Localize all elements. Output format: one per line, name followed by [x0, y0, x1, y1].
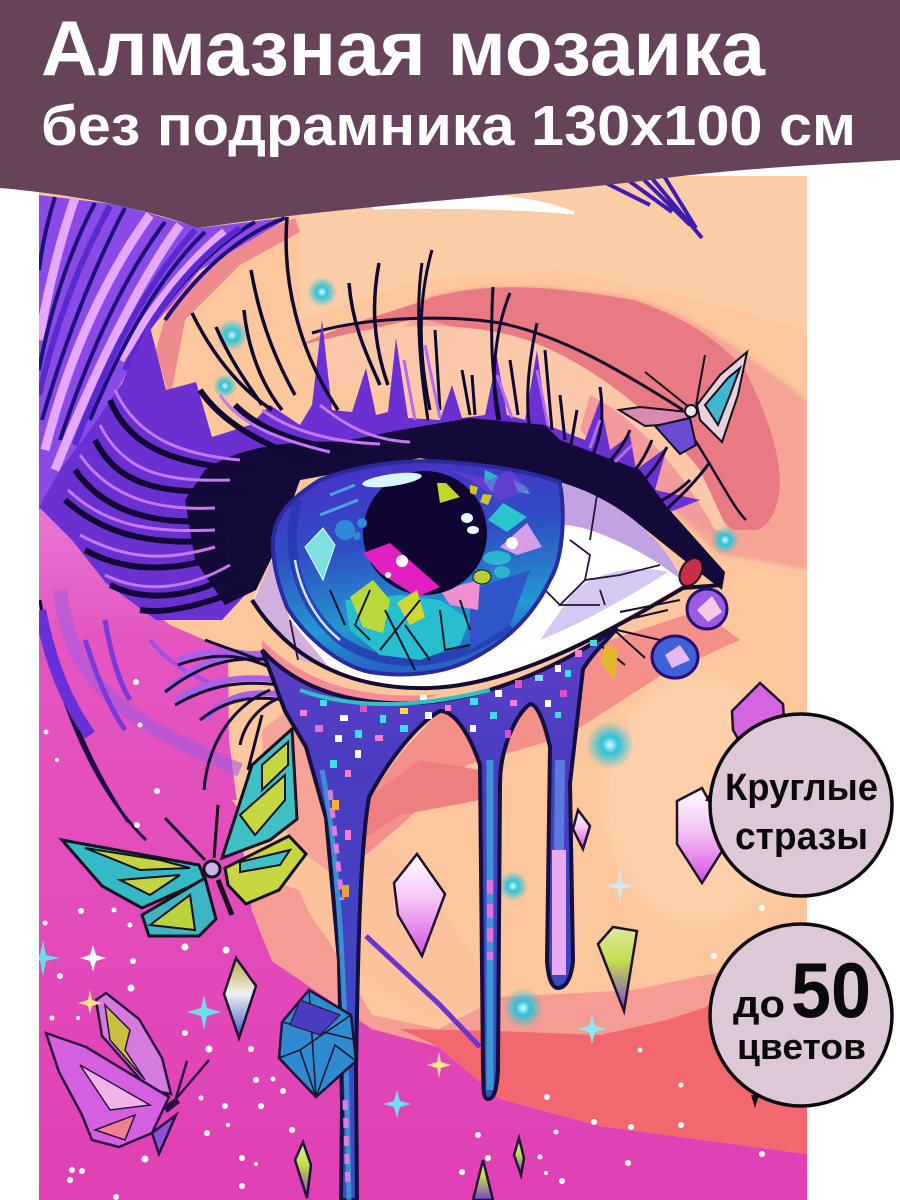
lilac shade [563, 483, 682, 580]
teal lower patch [345, 595, 470, 660]
gem purple facet [290, 1000, 340, 1035]
lash vein right [695, 440, 746, 520]
subtitle: без подрамника 130х100 см [41, 94, 856, 158]
glowing sparks [213, 277, 739, 1028]
yellow glitter spot [600, 645, 618, 680]
butterfly: top right [619, 352, 747, 454]
coral band under lower lid [360, 610, 740, 860]
eyebrow tip purple [600, 176, 702, 238]
upper eyelid inner pink [300, 287, 780, 530]
main drip highlight [322, 770, 349, 1200]
badge: up to 50 colours: 50 [791, 946, 871, 1034]
lower left lashes [165, 640, 290, 790]
badge: up to 50 colours: до [733, 984, 785, 1026]
coral band left of drip [262, 713, 329, 872]
glitter band [300, 640, 597, 897]
four point stars [80, 945, 106, 971]
inner cheek peach [232, 800, 328, 940]
butterfly: bottom left [46, 993, 209, 1154]
third drip upper blue [559, 760, 560, 850]
crease line [312, 318, 683, 410]
upper face wash [300, 176, 807, 330]
pink mosaic lower [440, 580, 480, 610]
white dots and stars [32, 679, 765, 1200]
blue right lower patch [470, 570, 530, 650]
dark coral wedge [362, 760, 480, 840]
crystal cone [598, 927, 637, 1011]
picture: diamond mosaic eye artwork [32, 176, 807, 1200]
iris inner rim [292, 500, 510, 661]
eyelash purple mass [39, 320, 700, 620]
badge: round rhinestones: Круглые [725, 767, 878, 809]
crystal right [677, 788, 725, 883]
crystals [224, 683, 785, 1200]
teal lid line [300, 690, 490, 704]
crystal bottom 1 [295, 1142, 311, 1198]
crystal bottom 3 [514, 1138, 524, 1175]
badge: round rhinestones [710, 714, 892, 896]
purple diagonal strand [366, 936, 480, 1047]
skin background [39, 176, 807, 1200]
butterfly: left [62, 729, 306, 936]
eye white [252, 482, 683, 690]
badge: up to 50 colours: цветов [737, 1026, 866, 1067]
gem facets [279, 990, 356, 1097]
badge: up to 50 colours [710, 924, 892, 1106]
hair [39, 195, 290, 510]
lower lid line [252, 585, 722, 688]
main drip pink flecks [330, 790, 348, 1190]
crystal teal piece [707, 760, 760, 810]
third drip highlight [552, 850, 566, 975]
crystal small centre right [573, 810, 590, 849]
upper left pink near hair [156, 218, 300, 400]
crystal centre [394, 854, 445, 956]
crystal top right [732, 683, 785, 760]
second drip pink flecks [487, 880, 493, 960]
lower lid pink band [262, 640, 440, 708]
left lilac shade [254, 560, 330, 668]
iris white arc [295, 560, 340, 640]
dark spike below badge [751, 1095, 759, 1108]
dripping tears [262, 628, 617, 1200]
iris facets [363, 543, 440, 597]
eyelid light fold [310, 326, 730, 535]
crystal left small [224, 958, 256, 1038]
lighter peach soft circle [607, 677, 763, 923]
title: Алмазная мозаика [41, 4, 766, 92]
iris cracks [330, 590, 470, 670]
header banner [0, 0, 900, 228]
hair dark strands [39, 197, 285, 440]
magenta left background [39, 500, 807, 1200]
large blue gem [279, 990, 356, 1097]
bubble tears [652, 589, 727, 678]
eyelid pink right shade [580, 395, 720, 540]
crystal bottom 2 [473, 1160, 493, 1200]
lash dark core [185, 418, 725, 605]
center lash lilac strands [404, 345, 632, 462]
left lash strands [65, 390, 410, 611]
lash black tips [192, 217, 710, 525]
tear duct [678, 557, 704, 586]
pupil [363, 471, 487, 595]
blue sclera shade [540, 569, 668, 640]
second drip highlight [486, 760, 494, 1090]
top white highlight [373, 196, 574, 213]
cheek salmon band [250, 885, 718, 1047]
upper eyelid outer pink [400, 286, 807, 570]
sclera veins [290, 495, 660, 660]
badge: round rhinestones: стразы [735, 816, 868, 858]
coral lower band [400, 1006, 807, 1154]
hair light strands [39, 198, 225, 470]
lower right lashes [600, 600, 680, 665]
hair lower strands [40, 590, 240, 840]
iris [273, 461, 563, 674]
